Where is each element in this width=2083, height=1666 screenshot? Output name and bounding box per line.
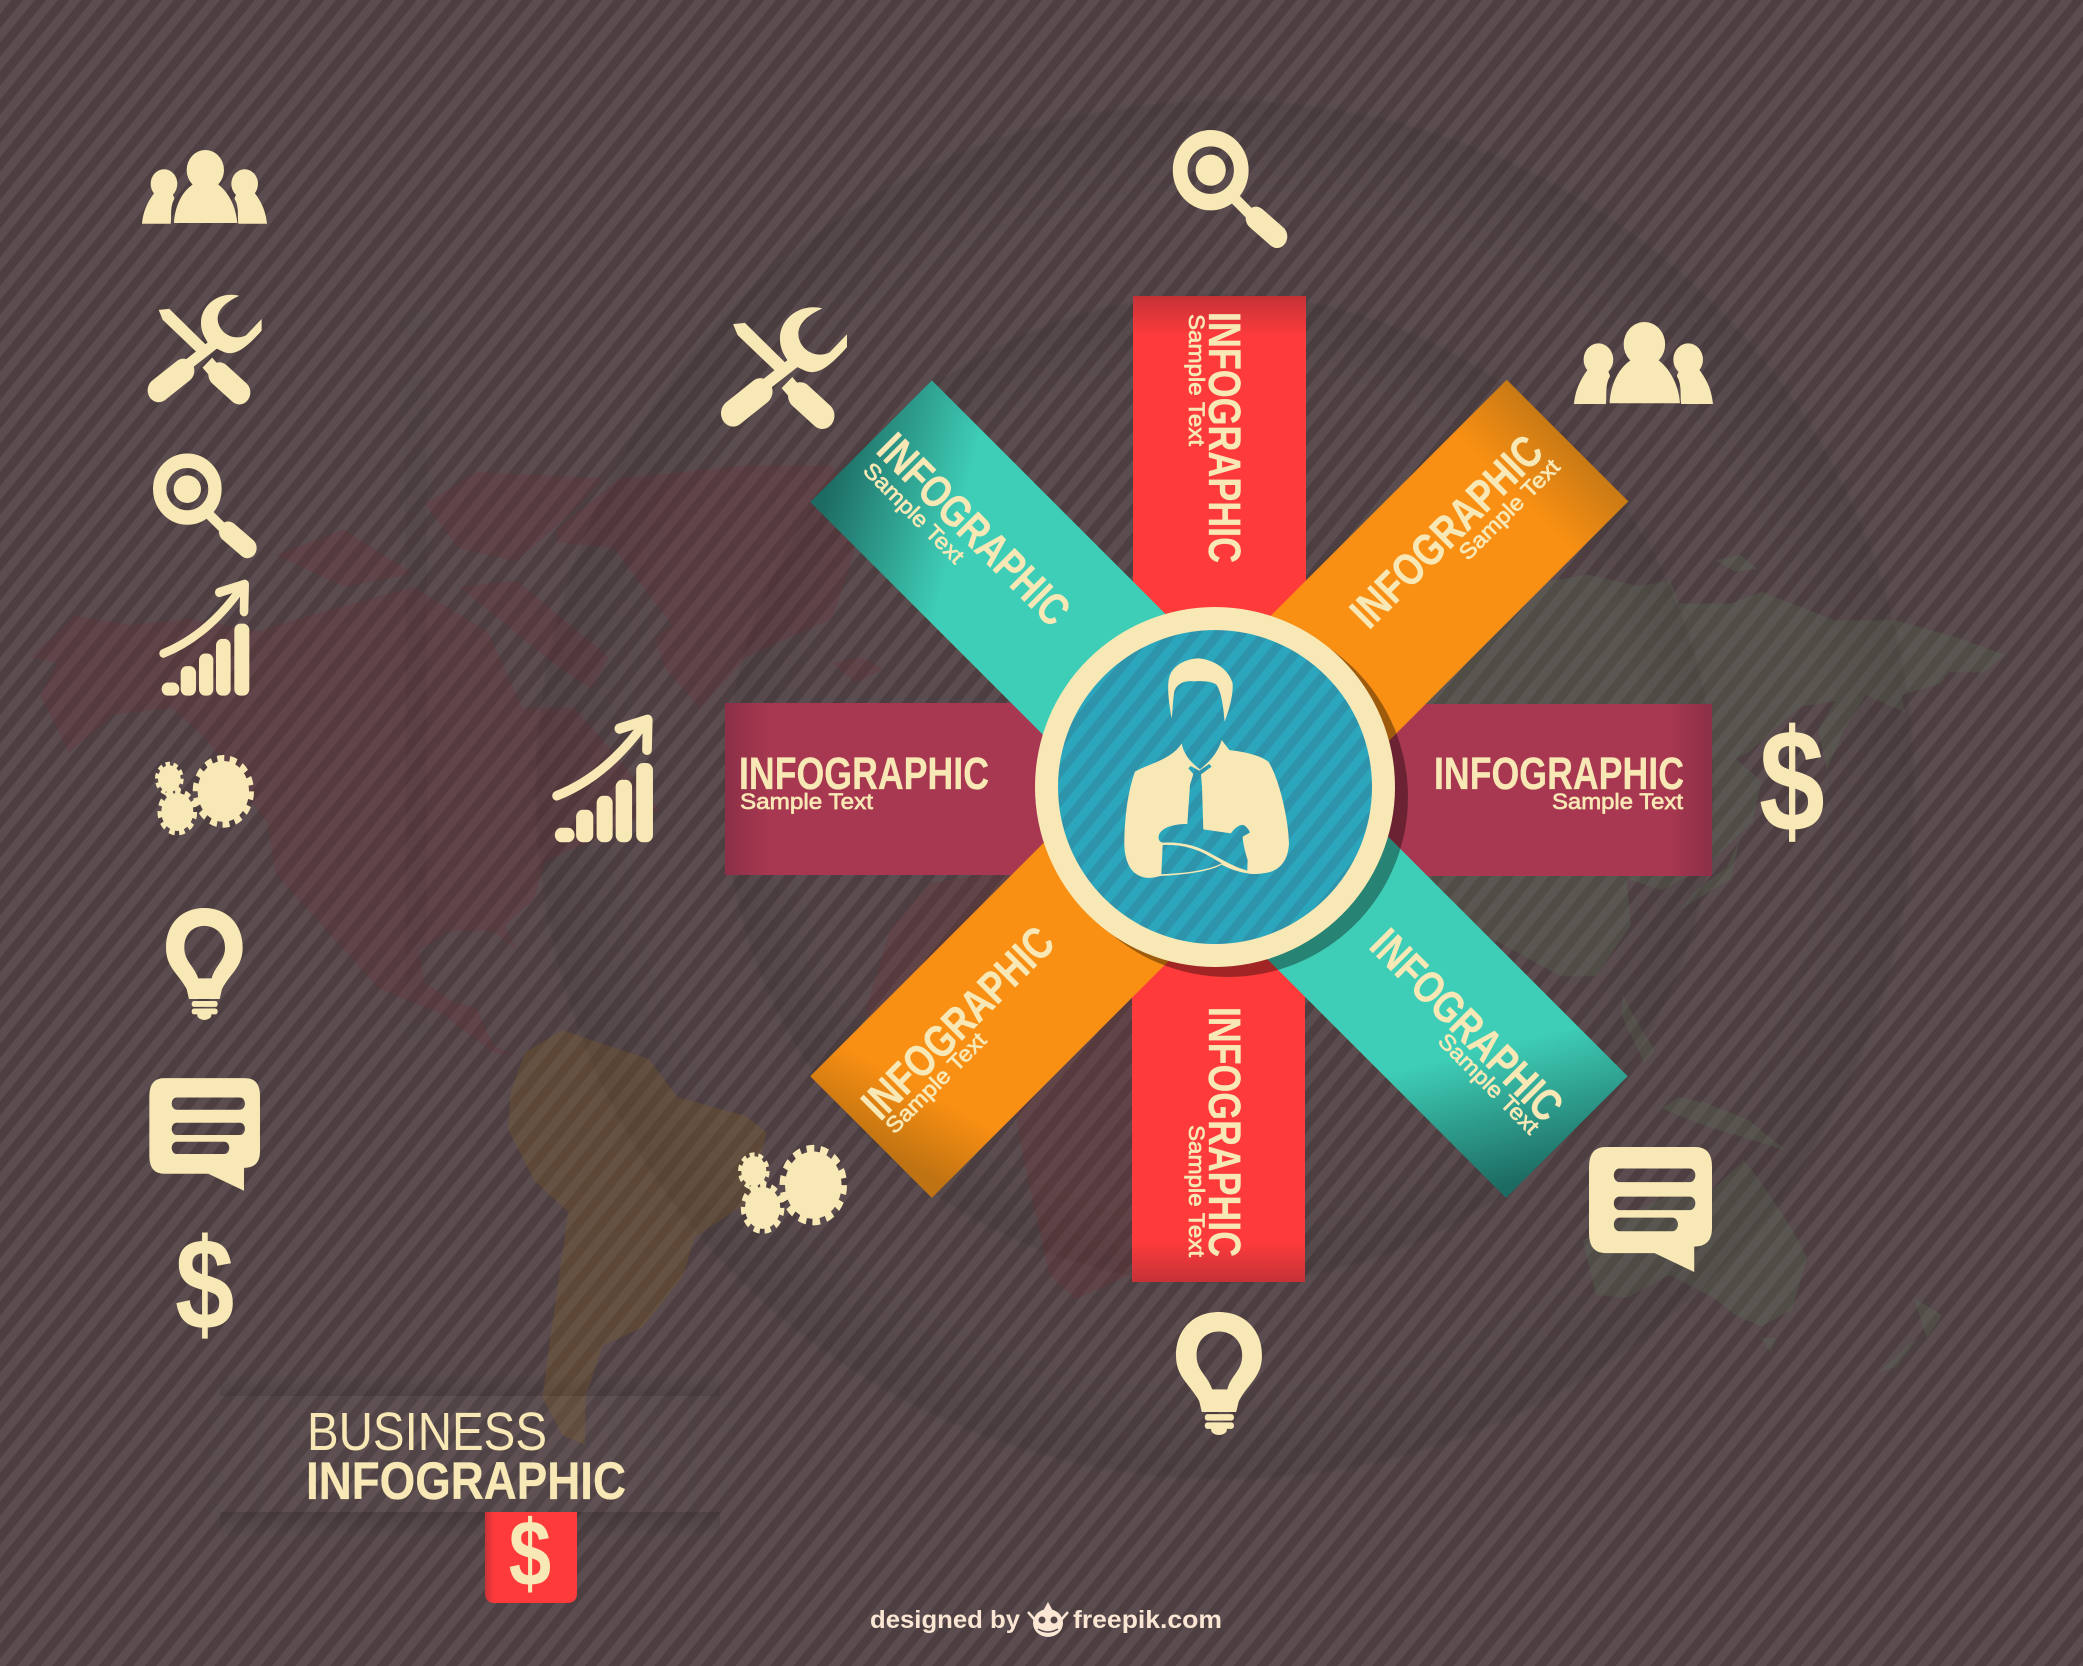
icon: magnifier: [160, 461, 247, 548]
icon: magnifier around wheel: [1180, 138, 1277, 237]
map: south america: [508, 1030, 766, 1445]
text: teal bottom-right: Sample Text: [1433, 1028, 1544, 1139]
icon: bulb around wheel: [1176, 1312, 1262, 1435]
map: asia and australia: [1374, 555, 2005, 1372]
panel: bottom-left orange bar: [810, 730, 1278, 1198]
red dollar tab: [485, 1502, 577, 1606]
icon: speech bubble around wheel: [1589, 1147, 1712, 1272]
title plate band: [190, 1376, 750, 1536]
heading: left bar: INFOGRAPHIC: [739, 748, 989, 799]
text: orange top-right: Sample Text: [1454, 454, 1565, 565]
credit text left: designed by: [870, 1606, 1020, 1634]
credit text right: freepik.com: [1073, 1606, 1222, 1634]
faint background circles: [405, 100, 1915, 1480]
icon: people around wheel: [1574, 322, 1713, 404]
text: teal top-left: Sample Text: [858, 457, 969, 569]
panel: bottom red bar: [1132, 940, 1305, 1282]
icon: dollar sign: $: [175, 1212, 234, 1357]
panel: top-right orange bar: [1157, 380, 1628, 851]
icon: gears: [157, 758, 251, 833]
heading: orange bottom-left: INFOGRAPHIC: [851, 916, 1064, 1129]
heading: teal top-left: INFOGRAPHIC: [868, 423, 1080, 636]
heading: right bar: INFOGRAPHIC: [1434, 748, 1684, 799]
icon: gears around wheel: [740, 1148, 844, 1231]
icon: businessman: [1124, 658, 1289, 878]
icon: growth chart: [162, 584, 249, 696]
heading: orange top-right: INFOGRAPHIC: [1340, 425, 1553, 638]
title line: infographic: INFOGRAPHIC: [306, 1452, 626, 1511]
left column icons: [142, 150, 267, 1357]
heading: teal bottom-right: INFOGRAPHIC: [1360, 919, 1573, 1131]
panel: top-left teal bar: [810, 380, 1276, 846]
icon: tab dollar: $: [509, 1502, 551, 1606]
map: north america: [32, 466, 884, 1056]
icon: speech bubble: [149, 1078, 260, 1191]
text: right bar: Sample Text: [1552, 789, 1683, 814]
panel: right maroon bar: [1370, 704, 1712, 876]
icon: tools around wheel: [733, 307, 847, 416]
text: orange bottom-left: Sample Text: [880, 1027, 991, 1138]
icon: tools: [159, 295, 262, 392]
icon: freepik logo: [1028, 1602, 1068, 1637]
icon: dollar around wheel: $: [1759, 700, 1825, 863]
icon: growth chart around wheel: [555, 720, 653, 842]
text: left bar: Sample Text: [740, 789, 873, 814]
panel: left maroon bar: [725, 703, 1065, 875]
map: africa: [866, 863, 1222, 1299]
text: bottom bar: Sample Text: [1184, 1125, 1209, 1257]
heading: top bar: INFOGRAPHIC: [1199, 312, 1250, 563]
text: top bar: Sample Text: [1184, 314, 1209, 446]
panel: top red bar: [1133, 296, 1306, 636]
heading: bottom bar: INFOGRAPHIC: [1199, 1007, 1250, 1257]
title line: business: BUSINESS: [307, 1402, 547, 1462]
center medallion: [1035, 607, 1408, 977]
icon: people: [142, 150, 267, 224]
footer credit: [870, 1602, 1222, 1637]
icon: light bulb: [166, 908, 243, 1020]
title: [306, 1402, 626, 1511]
world map: [32, 466, 2005, 1445]
panel: bottom-right teal bar: [1155, 725, 1628, 1198]
